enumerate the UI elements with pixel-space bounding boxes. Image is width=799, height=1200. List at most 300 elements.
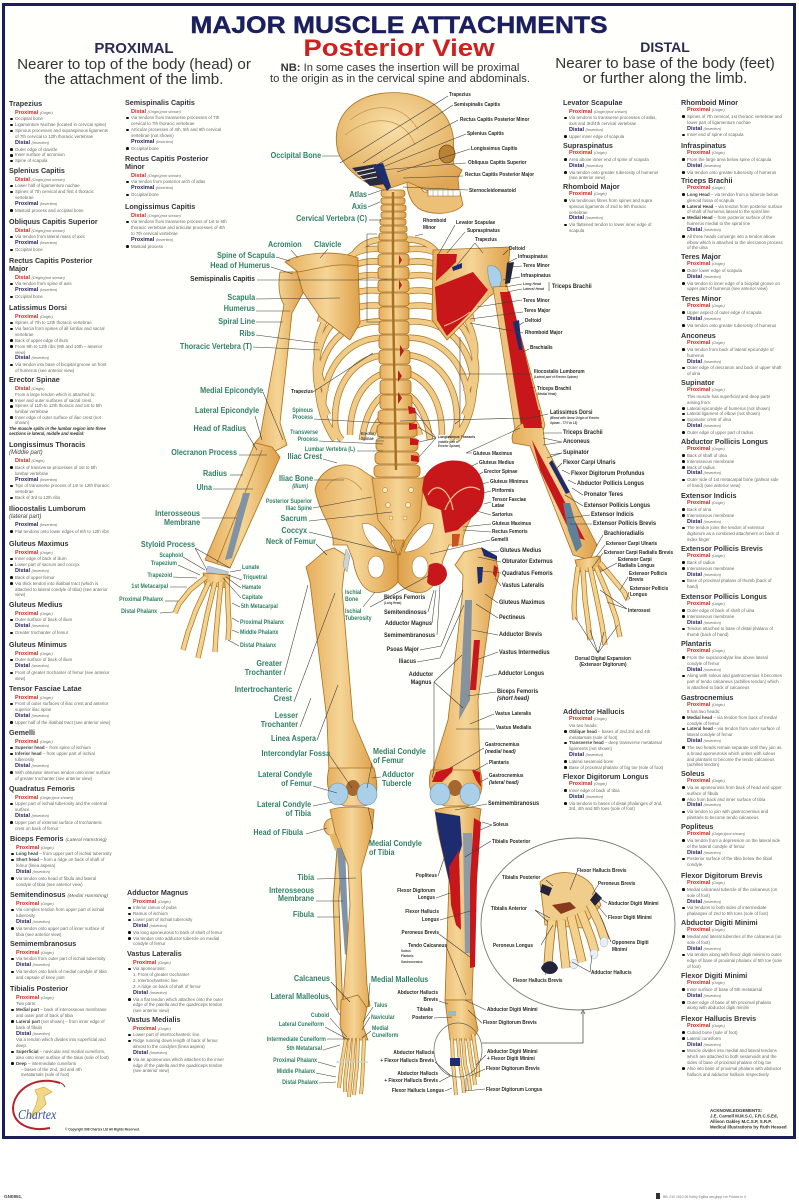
labels: left side of skeleton <box>119 240 397 649</box>
text: Adductor Hallucis: Proximal (Origin) <box>569 716 607 722</box>
label: 1st Metacarpal: 1st Metacarpal <box>131 584 168 590</box>
text: Gluteus Maximus: view) <box>15 592 25 597</box>
text: Adductor Hallucis <box>563 707 663 770</box>
label: Long and Lateral Head, Triceps Brachii <box>505 282 592 292</box>
text: Latissimus Dorsi <box>9 303 106 373</box>
label: Styloid Process: Styloid Process <box>141 540 195 549</box>
label: Abductor Digiti Minimi + Flexor Digiti Minimi <box>476 1049 538 1065</box>
label: Talus: Talus <box>374 1003 387 1009</box>
acknowledgements: Medical Illustrations by Ruth Hessed <box>710 1124 787 1130</box>
label: Lesser Trochanter: Lesser <box>275 711 298 720</box>
label: Middle Phalanx: Middle Phalanx <box>277 1069 316 1075</box>
heading: proximal: the attachment of the limb. <box>45 71 223 88</box>
text: Triceps Brachii: Triceps Brachii <box>681 176 733 185</box>
text: Tibialis Posterior: Medial part – back of interosseous membrane <box>16 1007 107 1012</box>
label: 5th Metacarpal: 5th Metacarpal <box>241 604 278 610</box>
right lower leg with muscles <box>435 807 481 1000</box>
text: Semispinalis Capitis <box>125 98 221 151</box>
text: Erector Spinae: The muscle splits in the lumbar region into three <box>9 426 106 431</box>
logo: Chartex: Chartex <box>18 1106 57 1122</box>
text: Biceps Femoris: condyle of tibia (see anterior view) <box>16 882 83 887</box>
text: Abductor Pollicis Longus: of hand) (see anterior view) <box>687 483 740 488</box>
text: Infraspinatus: Proximal (Origin) <box>687 150 725 156</box>
label: Extensor Indicis: Extensor Indicis <box>591 512 634 518</box>
text: Biceps Femoris: Short head – from a ridge on back of shaft of <box>16 857 104 862</box>
acknowledgements <box>710 1108 787 1130</box>
text: Rectus Capitis Posterior Minor: Minor <box>125 162 145 171</box>
label: Adductor Magnus <box>409 655 463 778</box>
text: Adductor Hallucis: Transverse head – deep transverse metatarsal <box>569 740 662 745</box>
text: Supinator: Supinator <box>681 378 715 387</box>
label: Extensor Carpi Ulnaris <box>596 541 657 557</box>
label: Extensor Pollicis Longus: Extensor Pollicis Longus <box>584 503 651 509</box>
text: Levator Scapulae: Levator Scapulae <box>563 98 623 107</box>
text: Gluteus Maximus: attached to lateral condyle of tibia) (see anterior <box>15 587 108 592</box>
spine <box>374 190 420 477</box>
label: Medial Condyle of Femur: of Femur <box>373 756 404 765</box>
text: Longissimus Thoracis: (Middle part) <box>9 450 43 456</box>
label: Talus <box>363 1003 387 1022</box>
label: Occipital Bone: Occipital Bone <box>271 151 322 160</box>
text: Obliquus Capitis Superior: Via tendon from lateral mass of axis <box>15 234 85 239</box>
label: Ulna: Ulna <box>196 483 213 492</box>
label: Biceps Femoris short head <box>468 689 539 702</box>
text: Popliteus: condyle <box>687 862 702 867</box>
label: Head of Fibula: Head of Fibula <box>253 828 304 837</box>
text: Abductor Digiti Minimi <box>681 919 782 970</box>
text: Rectus Capitis Posterior Major: Major <box>9 264 28 273</box>
text: Flexor Digitorum Brevis: Distal (Insertion) <box>687 899 721 905</box>
label: Plantaris <box>474 760 509 771</box>
text: Extensor Pollicis Longus <box>681 593 773 638</box>
text: Trapezius: Spinous processes and supraspinous ligaments <box>15 128 108 133</box>
label: Rhomboid Minor with bracket <box>367 218 446 322</box>
label: Levator Scapulae: Levator Scapulae <box>456 220 495 226</box>
label: Flexor Hallucis Longus <box>405 909 470 923</box>
label: Interosseous Membrane: Membrane <box>278 894 315 903</box>
text: Gemelli: Superior head – from spine of ischium <box>15 745 91 750</box>
text: Trapezius: Trapezius <box>9 99 42 108</box>
text: Flexor Digitorum Brevis: Proximal (Origin) <box>687 880 725 886</box>
label: Interosseous Membrane <box>269 886 343 903</box>
text: Quadratus Femoris: Upper part of ischial tuberosity and the external <box>15 801 107 806</box>
left tibia and fibula <box>324 807 374 1012</box>
text: Semispinalis Capitis: vertebrae (not shown) <box>131 133 174 138</box>
label: Head of Fibula <box>253 828 327 837</box>
label: Medial Cuneiform: Cuneiform <box>372 1033 398 1039</box>
text: Popliteus: Posterior surface of the tibia below the tibial <box>687 856 772 861</box>
text: Latissimus Dorsi: Via fascia from spines of all lumbar and sacral <box>15 326 104 331</box>
text: Soleus: surface of fibula <box>687 791 718 796</box>
label: Flexor Digitorum Longus: Longus <box>418 895 435 901</box>
label: Transverse Process <box>290 430 383 444</box>
text: Semimembranosus: Semimembranosus <box>10 939 76 948</box>
text: Gluteus Maximus <box>9 539 108 597</box>
text: Plantaris: is attached to back of calcaneus <box>687 685 749 690</box>
label: Adductor Longus: Adductor Longus <box>498 671 545 677</box>
text: Soleus <box>681 770 782 821</box>
label: Capitate <box>223 578 263 601</box>
label: Extensor Carpi Radialis Brevis: Extensor Carpi Radialis Brevis <box>604 550 673 556</box>
label: Lateral Condyle of Tibia <box>257 800 332 818</box>
label: Medial Condyle of Tibia: Medial Condyle <box>369 839 423 848</box>
text: Tensor Fasciae Latae: Distal (Insertion) <box>15 713 49 719</box>
label: Abductor Digiti Minimi + Flexor Digiti Minimi: + Flexor Digiti Minimi <box>487 1056 535 1062</box>
text: Semispinalis Capitis: Distal (Origin)(not shown) <box>131 108 181 114</box>
text: Triceps Brachii <box>681 176 783 250</box>
text: Obliquus Capitis Superior: Distal (Origin)(not shown) <box>15 228 65 234</box>
text: Gastrocnemius: Medial head – via tendon from back of medial <box>687 715 777 720</box>
label: Clavicle <box>314 240 342 258</box>
text: Gemelli: Proximal (Origin) <box>15 738 53 744</box>
label: Long and Lateral Head, Triceps Brachii: Long Head <box>523 282 542 286</box>
text: Teres Major: upper part of humerus (see anterior view) <box>687 286 768 291</box>
text: Trapezius: Distal (Insertion) <box>15 140 49 146</box>
label: Psoas Major: Psoas Major <box>386 647 420 653</box>
text: Infraspinatus: Via tendon onto greater tuberosity of humerus <box>687 170 776 175</box>
label: Humerus: Humerus <box>224 304 255 313</box>
text: Flexor Digitorum Brevis: Flexor Digitorum Brevis <box>681 871 762 880</box>
text: Abductor Digiti Minimi: Distal (Insertion) <box>687 946 721 952</box>
text: Gastrocnemius: It has two heads: <box>687 709 720 714</box>
label: Semitendinosus: Semitendinosus <box>384 610 427 616</box>
text: Gluteus Maximus: Gluteus Maximus <box>9 539 69 548</box>
label: Extensor Pollicis Longus: Extensor Pollicis <box>630 586 668 592</box>
text: Tibialis Posterior: Proximal (Origin) <box>16 994 54 1000</box>
label: Neck of Femur <box>266 537 327 555</box>
label: Pronator Teres: Pronator Teres <box>584 492 624 498</box>
label: Triceps Brachii <box>543 430 603 436</box>
text: Semimembranosus: Via tendon from outer part of ischial tuberosity <box>16 956 106 961</box>
text: Splenius Capitis: Splenius Capitis <box>9 166 65 175</box>
text: Vastus Medialis: Ridge running down length of back of femur <box>133 1038 218 1043</box>
label: Adductor Magnus: Magnus <box>411 680 432 686</box>
text: Anconeus: of ulna <box>687 371 700 376</box>
text: Splenius Capitis: vertebrae <box>15 195 34 200</box>
text: Rhomboid Major: Proximal (Origin) <box>569 191 607 197</box>
text: Soleus: Via an aponeurosis from back of head and upper <box>687 785 782 790</box>
label: Atlas: Atlas <box>349 190 367 199</box>
text: Teres Minor: Proximal (Origin) <box>687 303 725 309</box>
label: Medial Condyle of Tibia <box>368 807 423 857</box>
label: Biceps Femoris Long Head <box>370 575 430 607</box>
label: Medial Epicondyle: Medial Epicondyle <box>200 386 264 395</box>
text: Triceps Brachii: Proximal (Origin) <box>687 185 725 191</box>
label: Calcaneus <box>294 974 350 1002</box>
label: Middle Phalanx <box>277 1069 336 1077</box>
label: Ischial Tuberosity: Tuberosity <box>345 616 372 622</box>
label: Gluteus Maximus: Gluteus Maximus <box>492 521 531 527</box>
text: Plantaris: From the supracondylar line above lateral <box>687 655 768 660</box>
label: Ulna <box>196 483 253 492</box>
note: NB: to the origin as in the cervical spine and abdominals. <box>270 73 530 85</box>
text: Gemelli: Gemelli <box>9 728 35 737</box>
text: Triceps Brachii: Lateral Head – via tendon from posterior surface <box>687 204 782 209</box>
label: Sacrum <box>281 512 392 523</box>
text: Flexor Digitorum Brevis <box>681 872 777 917</box>
text: Flexor Hallucis Brevis <box>681 1015 781 1078</box>
text: Extensor Indicis: Proximal (Origin) <box>687 500 725 506</box>
label: Spine of Scapula: Spine of Scapula <box>217 251 276 260</box>
label: Trapezoid: Trapezoid <box>147 573 173 579</box>
text: Rhomboid Major: vertebrae <box>569 210 588 215</box>
label: inset Tibialis Anterior <box>491 906 550 922</box>
label: inset Tibialis Posterior <box>502 875 553 886</box>
label: Anconeus <box>543 438 590 445</box>
label: Gluteus Minimus: Gluteus Minimus <box>490 479 528 485</box>
heading: proximal: Nearer to top of the body (head) or <box>17 56 251 73</box>
text: Tibialis Posterior: Deep – intermediate cuneiform <box>16 1061 76 1066</box>
text: Supraspinatus: Distal (Insertion) <box>569 163 603 169</box>
label: Iliacus <box>399 605 464 665</box>
label: Vastus Lateralis <box>470 711 531 724</box>
text: Anconeus: Anconeus <box>681 331 716 340</box>
text: Supinator: arising from: <box>687 400 711 405</box>
label: Head of Radius: Head of Radius <box>194 424 246 433</box>
text: Semitendinosus: Distal (Insertion) <box>16 919 50 925</box>
label: Peroneus Brevis: Peroneus Brevis <box>402 930 439 936</box>
text: Tensor Fasciae Latae: Tensor Fasciae Latae <box>9 684 82 693</box>
label: Greater Trochanter: Greater <box>256 659 282 668</box>
label: Gastrocnemius medial head: Gastrocnemius <box>485 742 520 748</box>
label: Vastus Medialis: Vastus Medialis <box>496 725 531 731</box>
label: Tendo Calcaneus: Tendo Calcaneus <box>408 943 447 949</box>
text: Soleus: Proximal (Origin) <box>687 778 725 784</box>
label: Supinator <box>547 450 589 458</box>
label: Middle Phalanx: Middle Phalanx <box>240 630 279 636</box>
text: Flexor Digiti Minimi: along with abductor digiti minimi <box>687 1005 749 1010</box>
text: Adductor Hallucis: Via two heads: <box>569 723 598 728</box>
label: Atlas <box>349 190 382 199</box>
label: Trapezius: Trapezius <box>475 237 497 243</box>
label: inset Opponens Digiti Minimi: Minimi <box>612 947 628 953</box>
label: Gluteus Maximus <box>485 594 545 606</box>
label: Tibia: Tibia <box>297 873 315 882</box>
text: Supraspinatus: Via tendon onto greater tuberosity of humerus <box>569 170 658 175</box>
text: Rectus Capitis Posterior Major: Distal (Origin)(not shown) <box>15 274 65 280</box>
text: Supinator: Outer edge of upper part of radius <box>687 430 753 435</box>
label: Distal Phalanx <box>121 609 173 615</box>
right scapula with muscles <box>432 247 514 340</box>
text: Teres Minor: Upper aspect of outer edge of scapula <box>687 310 761 315</box>
acknowledgements: Allison Oakley M.C.S.P, S.R.P. <box>710 1119 772 1124</box>
label: Interosseous Membrane: Interosseous <box>269 886 314 895</box>
label: Biceps Femoris short head: (short head) <box>497 696 529 702</box>
text: Triceps Brachii: Distal (Insertion) <box>687 227 721 233</box>
label: Tensor Fasciae Latae: Tensor Fasciae <box>492 497 526 503</box>
label: Proximal Phalanx <box>232 618 285 626</box>
text: Teres Major: Outer lower edge of scapula <box>687 268 742 273</box>
label: Spinous Process: Spinous <box>292 408 313 414</box>
text: Tensor Fasciae Latae <box>9 684 110 725</box>
text: Soleus: Soleus <box>681 769 705 778</box>
text: Triceps Brachii: of shaft of humerus lateral to the spiral line <box>687 209 770 214</box>
acknowledgements: J.E. Carnell M.M.S.C, F.R.C.S.Ed, <box>710 1114 778 1118</box>
text: Popliteus: of the lateral condyle of femur <box>687 844 745 849</box>
text: Supraspinatus: Area above inner end of spine of scapula <box>569 157 649 162</box>
panel: distal text column 1 <box>563 98 663 811</box>
label: Olecranon Process: Olecranon Process <box>171 448 237 457</box>
text: Vastus Lateralis: 1. Front of greater trochanter <box>133 972 189 977</box>
text: Extensor Pollicis Brevis <box>681 545 771 590</box>
text: Semitendinosus: tibia (see anterior view) <box>16 932 61 937</box>
label: Teres Minor <box>510 263 550 269</box>
label: Abductor Hallucis + Flexor Hallucis Brevis <box>380 1050 450 1075</box>
text: Anconeus: Outer edge of olecranon and back of upper shaft <box>687 365 781 370</box>
text: Abductor Digiti Minimi: Abductor Digiti Minimi <box>681 918 758 927</box>
text: Semispinalis Capitis: Proximal (Insertion) <box>131 139 173 145</box>
text: Trapezius: of 7th cervical to 12th thoracic vertebrae <box>15 134 93 139</box>
label: Lesser Trochanter: Trochanter <box>261 720 298 729</box>
text: Gastrocnemius: Proximal (Origin) <box>687 702 725 708</box>
text: Biceps Femoris <box>10 834 112 887</box>
label: inset Flexor Hallucis Brevis <box>513 970 563 984</box>
text: Gastrocnemius: condyle of femur <box>687 721 719 726</box>
text: Splenius Capitis: Spines of 7th cervical and first 4 thoracic <box>15 189 94 194</box>
text: Abductor Digiti Minimi: Via tendon along with flexor digiti minimi to outer <box>687 952 781 957</box>
label: Gastrocnemius medial head: (medial head) <box>485 749 516 755</box>
text: Extensor Pollicis Brevis: Back of radius <box>687 560 715 565</box>
label: Abductor Hallucis + Flexor Hallucis Brevis: Abductor Hallucis <box>393 1050 434 1056</box>
text: Trapezius: Spine of scapula <box>15 158 47 163</box>
label: Head of Radius <box>194 424 257 450</box>
text: Vastus Medialis: edge of the patella and the quadriceps tendon <box>133 1063 222 1068</box>
text: Trapezius: Outer edge of clavicle <box>15 147 57 152</box>
text: Abductor Digiti Minimi: edge of base of proximal phalanx of 5th toe (sole <box>687 958 782 963</box>
label: Extensor Pollicis Brevis: Brevis <box>629 577 644 583</box>
text: Trapezius: Proximal (Origin) <box>15 110 53 116</box>
label: Adductor Magnus <box>385 590 436 627</box>
text: Tensor Fasciae Latae: Proximal (Origin) <box>15 694 53 700</box>
label: Gluteus Medius: Gluteus Medius <box>500 548 542 554</box>
label: Rectus Capitis Posterior Major: Rectus Capitis Posterior Major <box>465 172 534 178</box>
label: Lateral Condyle of Femur: Lateral Condyle <box>258 770 313 779</box>
label: Greater Trochanter: Trochanter <box>245 668 282 677</box>
text: Gastrocnemius: Lateral head – via tendon from outer surface of <box>687 726 780 731</box>
text: Semispinalis Capitis: cervical to 7th thoracic vertebrae <box>131 121 194 126</box>
text: Flexor Hallucis Brevis: Cuboid bone (sole of foot) <box>687 1030 738 1035</box>
label: Axis: Axis <box>352 202 367 211</box>
label: Adductor Magnus: Adductor Magnus <box>385 621 433 627</box>
text: Tibialis Posterior: – bases of the 2nd, 3rd and 4th <box>21 1067 82 1072</box>
text: Supinator: Supinator crest of ulna <box>687 417 731 422</box>
text: Popliteus: Distal (Insertion) <box>687 850 721 856</box>
label: Lateral Cuneiform <box>279 1022 347 1039</box>
label: Pronator Teres <box>572 488 624 498</box>
text: Popliteus <box>681 823 780 868</box>
text: Flexor Digitorum Longus: Proximal (Origin) <box>569 781 607 787</box>
label: Longissimus Thoracis: Longissimus Thoracis <box>438 435 475 439</box>
label: Ischial Bone <box>345 590 362 603</box>
text: Soleus: plantaris to become tendo calcaneus <box>687 815 759 820</box>
label: Brachialis: Brachialis <box>530 345 553 351</box>
label: Thoracic Vertebra: Thoracic Vertebra (T) <box>180 342 252 351</box>
label: Acromion <box>268 240 302 258</box>
label: Erector Spinae: Erector <box>361 431 375 436</box>
text: Soleus: Also from back and inner surface of tibia <box>687 797 765 802</box>
label: Extensor Carpi Ulnaris: Extensor Carpi Ulnaris <box>606 541 657 547</box>
text: Rectus Capitis Posterior Minor: Distal (Origin)(not shown) <box>131 172 181 178</box>
text: Extensor Pollicis Longus: thumb (back of hand) <box>687 632 728 637</box>
text: Obliquus Capitis Superior: Occipital bone <box>15 247 43 252</box>
text: Splenius Capitis <box>9 166 94 213</box>
text: Tibialis Posterior: also onto inner surface of the talus (sole of foot) <box>16 1055 109 1060</box>
text: Biceps Femoris: Biceps Femoris (Lateral Hamstring) <box>10 834 107 843</box>
label: Triquetral <box>228 575 267 581</box>
label: inset Peroneus Longus: Peroneus Longus <box>493 943 533 949</box>
label: Longissimus Thoracis <box>415 411 475 458</box>
text: Tibialis Posterior: deep: <box>16 1043 27 1048</box>
label: inset Peroneus Brevis: Peroneus Brevis <box>598 881 636 887</box>
label: Adductor Brevis: Adductor Brevis <box>499 632 543 638</box>
pelvis <box>315 465 481 593</box>
text: Adductor Magnus: Inferior ramus of pubis <box>133 905 177 910</box>
footer: barcode and print details: BB: 010 1510 06 Kelby Eglitta ww.gbpp.cm Printed in X <box>663 1195 747 1199</box>
text: Anconeus <box>681 331 782 376</box>
label: Neck of Femur: Neck of Femur <box>266 537 316 546</box>
label: Gemelli <box>430 537 509 554</box>
label: Lesser Trochanter <box>261 698 311 729</box>
text: Vastus Medialis: Distal (Insertion) <box>133 1050 167 1056</box>
label: Vastus Intermedius <box>476 650 550 660</box>
text: Semispinalis Capitis: Occipital bone <box>131 146 159 151</box>
text: Abductor Pollicis Longus: Distal (Insertion) <box>687 470 721 476</box>
label: inset Opponens Digiti Minimi <box>600 915 649 953</box>
text: Supinator: This muscle has superficial and deep parts <box>687 394 770 399</box>
label: Lateral Condyle of Femur: of Femur <box>281 779 312 788</box>
label: Clavicle: Clavicle <box>314 240 342 249</box>
text: Teres Minor <box>681 294 776 328</box>
label: Spiral Line: Spiral Line <box>218 317 256 326</box>
label: inset top Flexor Hallucis Brevis: Flexor Hallucis Brevis <box>577 868 627 874</box>
text: Semimembranosus: Via tendon onto back of medial condyle of tibia <box>16 969 107 974</box>
label: Posterior Superior Iliac Spine: Iliac Spine <box>286 506 312 512</box>
label: Rhomboid Major: Rhomboid Major <box>525 330 562 336</box>
text: Rhomboid Major: scapula <box>569 228 584 233</box>
text: Latissimus Dorsi: Latissimus Dorsi <box>9 303 67 312</box>
text: Triceps Brachii: of the ulna <box>687 245 708 250</box>
label: Rectus Capitis Posterior Major <box>403 172 534 178</box>
label: Deltoid: Deltoid <box>509 246 525 252</box>
label: Erector Spinae <box>361 431 384 441</box>
text: Quadratus Femoris: Distal (Insertion) <box>15 813 49 819</box>
label: Lunate <box>230 565 259 572</box>
text: Abductor Pollicis Longus: Outer side of 1st metacarpal bone (palmar side <box>687 477 779 482</box>
text: Biceps Femoris: Via tendon onto head of fibula and lateral <box>16 876 96 881</box>
text: Longissimus Thoracis: vertebrae <box>15 489 34 494</box>
right hand <box>574 556 628 645</box>
text: Rectus Capitis Posterior Minor: Proximal (Insertion) <box>131 185 173 191</box>
label: Gastrocnemius lateral head: Gastrocnemius <box>489 773 524 779</box>
label: Tendo Calcaneus: Gastrocnemius <box>401 960 423 964</box>
label: Flexor Digitorum Brevis: Flexor Digitorum Brevis <box>486 1066 540 1072</box>
label: Fibula: Fibula <box>293 910 315 919</box>
label: Obliquus Capitis Superior: Obliquus Capitis Superior <box>468 160 527 166</box>
text: Longissimus Thoracis: Back of 3rd to 12th ribs <box>15 495 60 500</box>
text: Semimembranosus: Proximal (Origin) <box>16 950 54 956</box>
label: Spinous Process <box>292 408 383 423</box>
label: Tensor Fasciae Latae <box>484 497 526 509</box>
text: Trapezius <box>9 99 108 163</box>
text: Flexor Digitorum Longus: Inner edge of back of tibia <box>569 788 620 793</box>
label: Gluteus Maximus: Gluteus Maximus <box>499 600 545 606</box>
text: Latissimus Dorsi: Proximal (Origin) <box>15 314 53 320</box>
text: Flexor Digitorum Brevis: sole of foot) <box>687 893 710 898</box>
text: Vastus Lateralis: edge of the patella and the quadriceps tendon <box>133 1002 222 1007</box>
label: Flexor Hallucis Longus: Flexor Hallucis <box>405 909 439 915</box>
label: Brachioradialis: Brachioradialis <box>604 531 645 537</box>
label: Obturator Externus: Obturator Externus <box>502 559 553 565</box>
